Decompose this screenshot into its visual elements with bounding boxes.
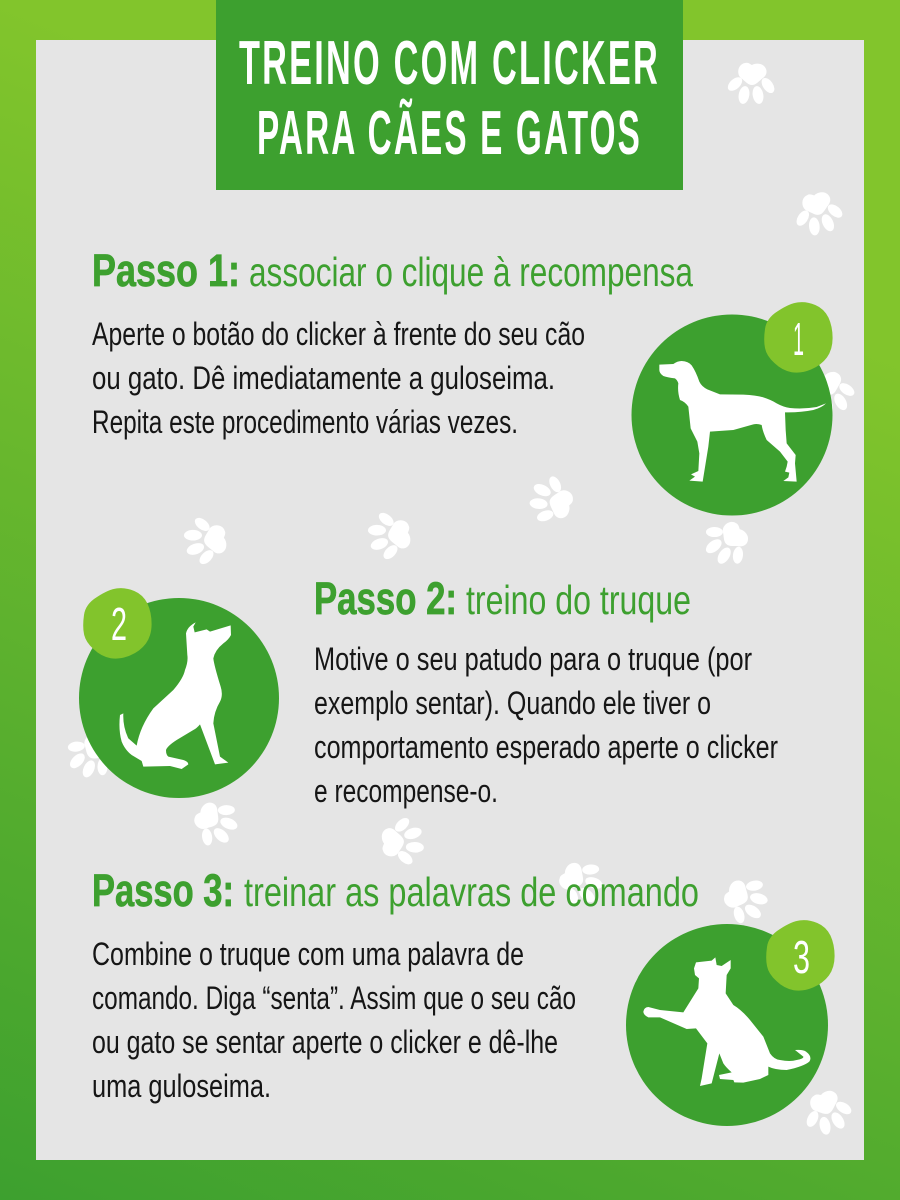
- step 3 heading: [92, 865, 699, 916]
- step 2 body text: Motive o seu patudo para o truque (por: [314, 641, 752, 677]
- step 2 heading: treino do truque: [466, 577, 691, 623]
- step 2 heading: Passo 2:: [314, 573, 457, 624]
- step 1 section: [92, 245, 833, 516]
- badge number 2: 2: [111, 598, 127, 650]
- step 2 body text: [314, 641, 778, 809]
- step 2 body text: exemplo sentar). Quando ele tiver o: [314, 685, 711, 721]
- badge number 1: [764, 302, 833, 373]
- step 3 heading: Passo 3:: [92, 865, 234, 916]
- step 1 heading: [92, 245, 693, 296]
- step 2 section: [79, 573, 778, 809]
- step 3 body text: Combine o truque com uma palavra de: [92, 936, 524, 972]
- badge number 3: [766, 920, 835, 991]
- badge number 1: 1: [793, 313, 804, 365]
- step 3 body text: [92, 936, 576, 1104]
- icon: cat raising paw: [643, 957, 810, 1086]
- icon: standing dog: [659, 361, 826, 482]
- step 2 heading: [314, 573, 691, 624]
- icon: sitting dog: [119, 622, 231, 769]
- step 1 body text: ou gato. Dê imediatamente a guloseima.: [92, 360, 555, 396]
- step 3 body text: uma guloseima.: [92, 1068, 271, 1104]
- step 1 heading: associar o clique à recompensa: [249, 249, 693, 295]
- step 2 body text: comportamento esperado aperte o clicker: [314, 729, 778, 765]
- step 1 body text: [92, 316, 585, 440]
- step 2 body text: e recompense-o.: [314, 773, 498, 809]
- step 3 green circle: [626, 924, 828, 1126]
- step 3 body text: ou gato se sentar aperte o clicker e dê-lhe: [92, 1024, 558, 1060]
- step 3 heading: treinar as palavras de comando: [244, 869, 699, 915]
- badge number 2: [83, 588, 152, 659]
- step 1 body text: Repita este procedimento várias vezes.: [92, 404, 518, 440]
- title text: [239, 29, 660, 168]
- badge number 3: 3: [793, 931, 810, 983]
- step 3 section: [92, 865, 835, 1126]
- step 2 green circle: [79, 598, 279, 798]
- step 1 green circle: [632, 314, 832, 516]
- step 3 body text: comando. Diga “senta”. Assim que o seu cão: [92, 980, 576, 1016]
- title banner: [216, 0, 683, 190]
- step 1 body text: Aperte o botão do clicker à frente do seu cão: [92, 316, 585, 352]
- step 1 heading: Passo 1:: [92, 245, 240, 296]
